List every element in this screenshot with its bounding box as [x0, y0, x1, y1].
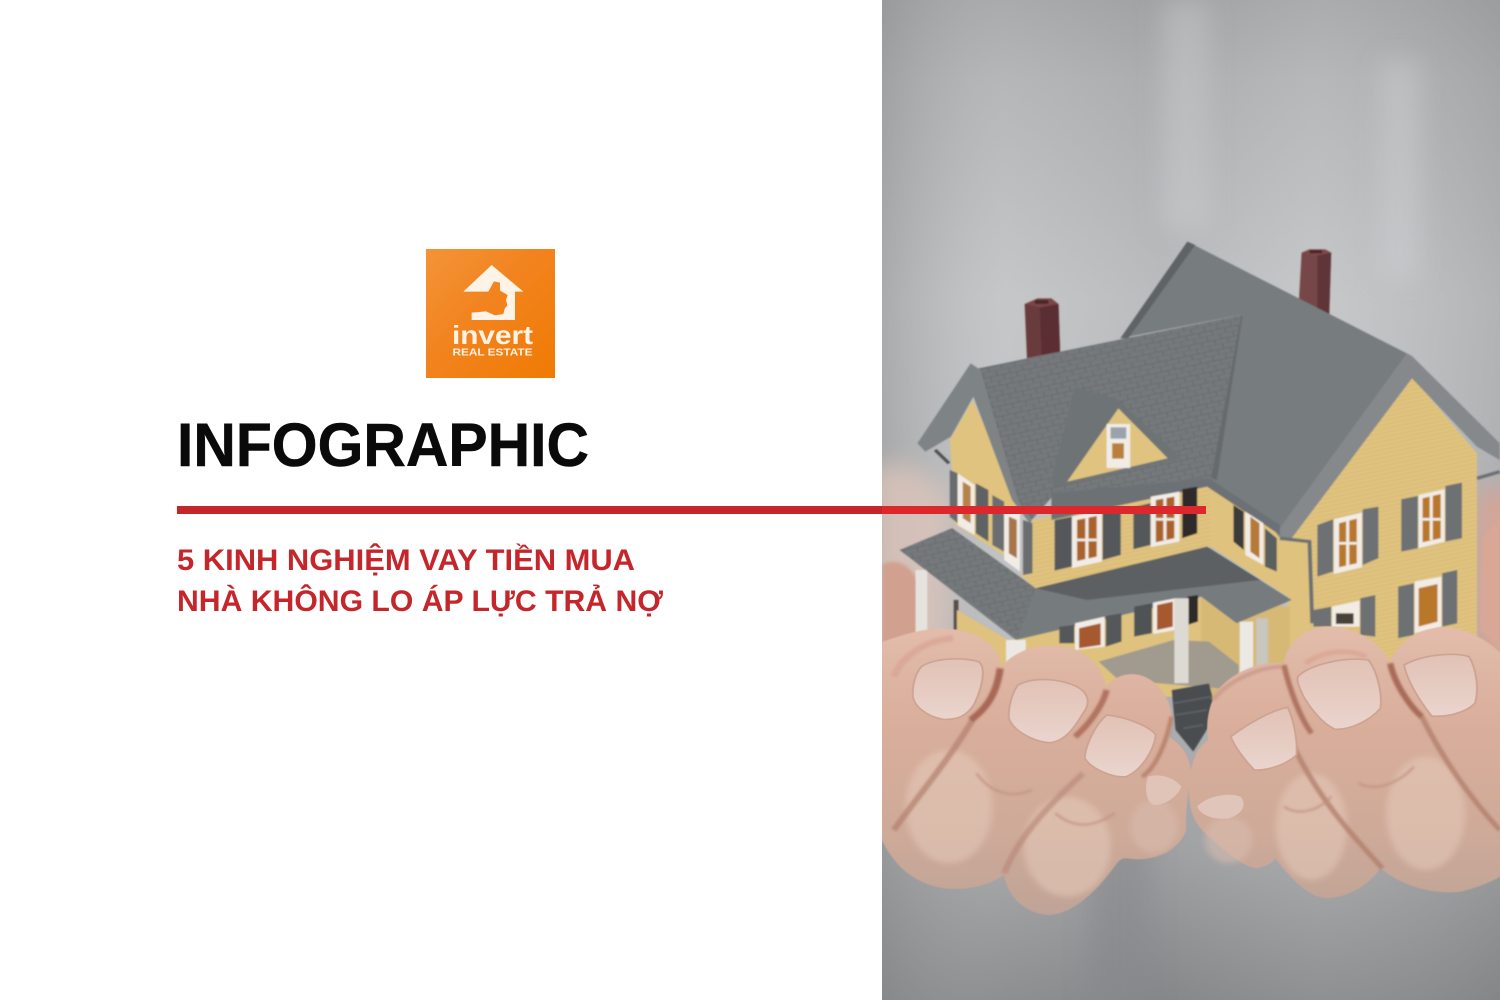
side window [1233, 505, 1277, 572]
chimney: right [1299, 249, 1331, 316]
logo: invert real estate [426, 249, 555, 378]
hand highlights [906, 750, 1465, 897]
porch stairs [1172, 683, 1217, 752]
illustration: model house [900, 242, 1500, 752]
icon: house with thumbs up [463, 265, 523, 320]
logo wordmark: invert [452, 320, 533, 350]
title: INFOGRAPHIC [177, 411, 589, 479]
fingernails [913, 654, 1477, 819]
left hand [878, 629, 1191, 915]
lower wall [957, 597, 1209, 697]
left gable wall [950, 400, 1018, 563]
main roof [1120, 242, 1410, 535]
illustration: hands [878, 627, 1500, 915]
roof valley shadow [1211, 315, 1243, 480]
subtitle [177, 543, 663, 618]
gutter [935, 450, 949, 463]
porch columns [1174, 598, 1189, 683]
subtitle line 1: 5 KINH NGHIỆM VAY TIỀN MUA [177, 543, 635, 577]
hand creases [894, 638, 1500, 873]
right gable roof edge [1276, 353, 1500, 540]
divider: red line [177, 506, 1206, 514]
subtitle line 2: NHÀ KHÔNG LO ÁP LỰC TRẢ NỢ [177, 584, 663, 618]
front roof shingles [979, 315, 1241, 520]
right gutter [1280, 472, 1500, 623]
logo tagline: REAL ESTATE [452, 346, 532, 358]
porch roof [900, 528, 1292, 640]
left gable roof edge [917, 363, 1033, 523]
porch column left [915, 570, 927, 633]
dormer [1067, 408, 1168, 482]
lower windows [1059, 570, 1457, 650]
front wall upper [1022, 483, 1211, 588]
panel: house in hands photo [870, 0, 1500, 1000]
right gable wall [1292, 377, 1477, 680]
side wall [1210, 489, 1310, 648]
right hand [1189, 627, 1500, 898]
upper left windows [950, 470, 1033, 575]
upper right windows [1317, 483, 1462, 577]
porch floor [1099, 640, 1239, 690]
upper front windows [1055, 487, 1197, 571]
chimney: left [1025, 298, 1060, 358]
